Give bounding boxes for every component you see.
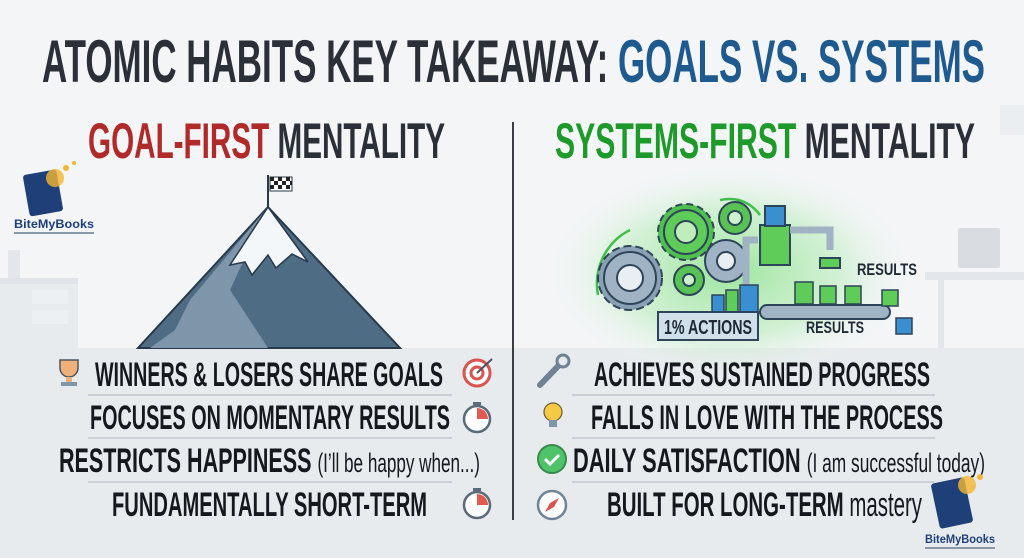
background desk left [0, 250, 78, 348]
conveyor [760, 305, 890, 319]
separators [88, 395, 935, 482]
illustration: mountain [138, 175, 400, 348]
list: goal-first: FOCUSES ON MOMENTARY RESULTS [90, 399, 450, 437]
icon: trophy [60, 360, 78, 386]
logo: right: BiteMyBooks [925, 532, 995, 546]
list: systems-first [538, 355, 985, 524]
logo: right [925, 474, 995, 549]
label: results top: RESULTS [857, 260, 917, 279]
list: goal-first: FUNDAMENTALLY SHORT-TERM [112, 486, 427, 524]
icon: wrench [540, 355, 569, 385]
icon: target [464, 359, 492, 386]
list: goal-first [59, 356, 492, 524]
icon: stopwatch 2 [464, 488, 490, 518]
robot arm [746, 206, 840, 302]
divider [512, 122, 514, 520]
icon: check [538, 445, 566, 473]
gears [598, 202, 751, 310]
icon: bulb [544, 403, 562, 427]
icon: compass [538, 491, 566, 519]
label: 1% actions [658, 312, 758, 340]
icon: stopwatch [464, 402, 490, 432]
list: systems-first: BUILT FOR LONG-TERM mastery [607, 486, 922, 524]
background desk right [925, 105, 1024, 348]
illustration: systems machine [550, 167, 917, 377]
bottom band [0, 348, 1024, 558]
logo: left: BiteMyBooks [14, 217, 94, 231]
logo: left [14, 161, 94, 234]
label: 1% actions: 1% ACTIONS [664, 317, 752, 339]
heading: goal-first: GOAL-FIRST MENTALITY [88, 113, 445, 169]
list: goal-first: WINNERS & LOSERS SHARE GOALS [95, 356, 443, 394]
label: results bottom: RESULTS [806, 318, 864, 337]
list: goal-first: RESTRICTS HAPPINESS (I’ll be happy when...) [59, 442, 480, 480]
